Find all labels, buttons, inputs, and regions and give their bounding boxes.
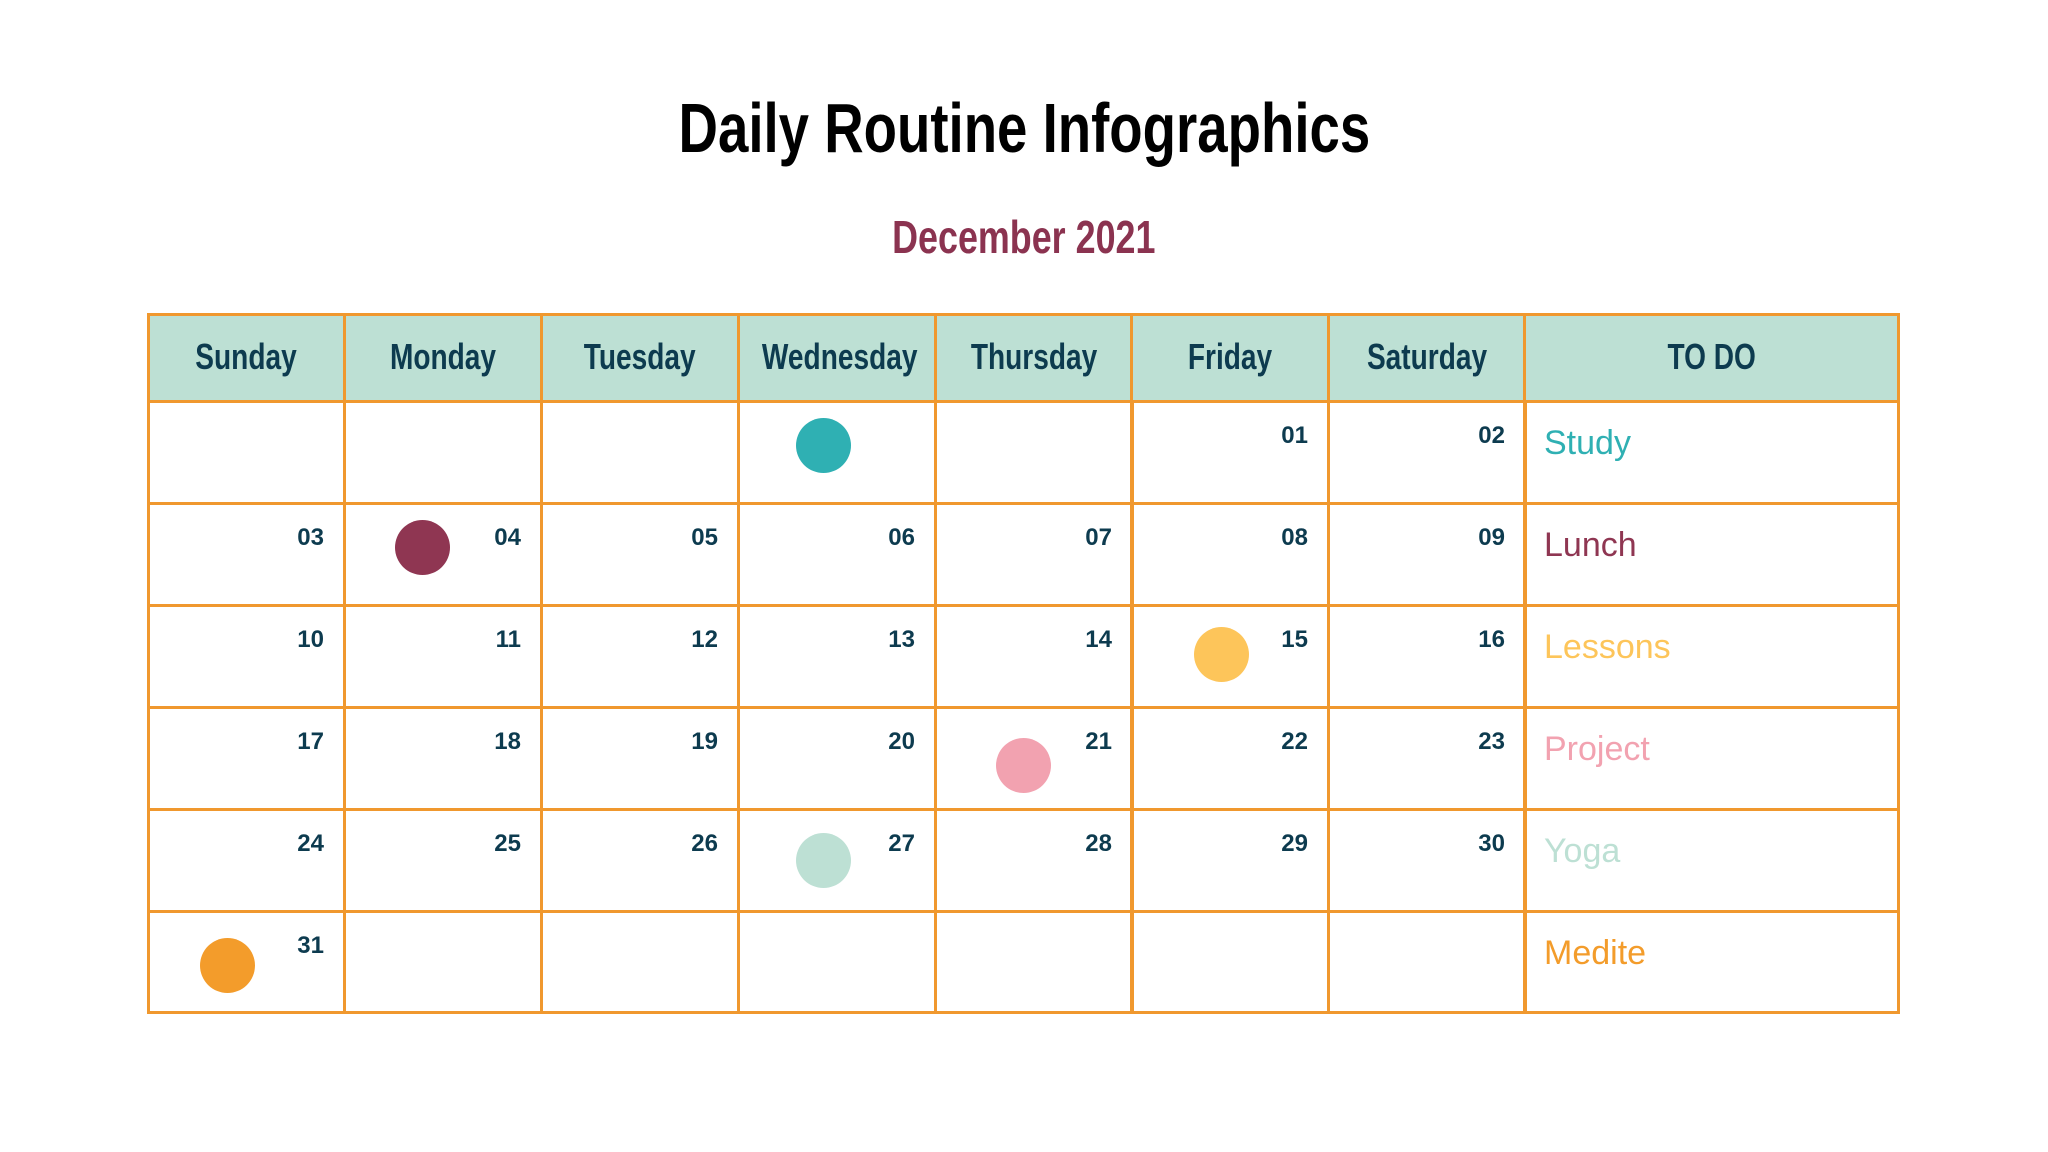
day cells: 28 <box>1085 830 1112 857</box>
day cells: 26 <box>691 830 718 857</box>
day cells: 29 <box>1281 830 1308 857</box>
to do list: Lunch <box>1544 526 1637 564</box>
day cells: 30 <box>1478 830 1505 857</box>
header row: Thursday <box>971 336 1097 377</box>
header row <box>147 313 1900 400</box>
day cells: 18 <box>494 728 521 755</box>
to do list: Medite <box>1544 934 1646 972</box>
header row: Wednesday <box>762 336 917 377</box>
day cells: 19 <box>691 728 718 755</box>
day cells: 12 <box>691 626 718 653</box>
header row: Tuesday <box>584 336 696 377</box>
header row: Friday <box>1188 336 1272 377</box>
calendar table <box>147 313 1900 1014</box>
day cells: 02 <box>1478 422 1505 449</box>
day cells: 13 <box>888 626 915 653</box>
day cells: 11 <box>496 626 521 653</box>
day cells: 22 <box>1281 728 1308 755</box>
day cells: 09 <box>1478 524 1505 551</box>
subtitle: December 2021 <box>892 211 1156 263</box>
day cells: 04 <box>494 524 521 551</box>
header row: Monday <box>390 336 496 377</box>
day cells: 24 <box>297 830 324 857</box>
day cells: 06 <box>888 524 915 551</box>
day cells: 05 <box>691 524 718 551</box>
day cells: 08 <box>1281 524 1308 551</box>
marker dots <box>200 418 1249 993</box>
day cells: 20 <box>888 728 915 755</box>
day cells: 17 <box>297 728 324 755</box>
to do list: Yoga <box>1544 832 1620 870</box>
day cells: 27 <box>888 830 915 857</box>
to do list: Project <box>1544 730 1650 768</box>
day cells: 31 <box>297 932 324 959</box>
day cells <box>147 403 1527 1014</box>
day cells: 23 <box>1478 728 1505 755</box>
to do list: Lessons <box>1544 628 1671 666</box>
header row: Saturday <box>1367 336 1487 377</box>
day cells: 07 <box>1085 524 1112 551</box>
day cells: 15 <box>1281 626 1308 653</box>
header row: TO DO <box>1667 336 1756 377</box>
header row: Sunday <box>196 336 297 377</box>
day cells: 25 <box>494 830 521 857</box>
to do list: Study <box>1544 424 1631 462</box>
day cells: 14 <box>1085 626 1112 653</box>
day cells: 16 <box>1478 626 1505 653</box>
day cells: 03 <box>297 524 324 551</box>
day cells: 21 <box>1085 728 1112 755</box>
day cells: 01 <box>1281 422 1308 449</box>
day cells: 10 <box>297 626 324 653</box>
to do list <box>1523 403 1900 1014</box>
title: Daily Routine Infographics <box>678 89 1370 167</box>
